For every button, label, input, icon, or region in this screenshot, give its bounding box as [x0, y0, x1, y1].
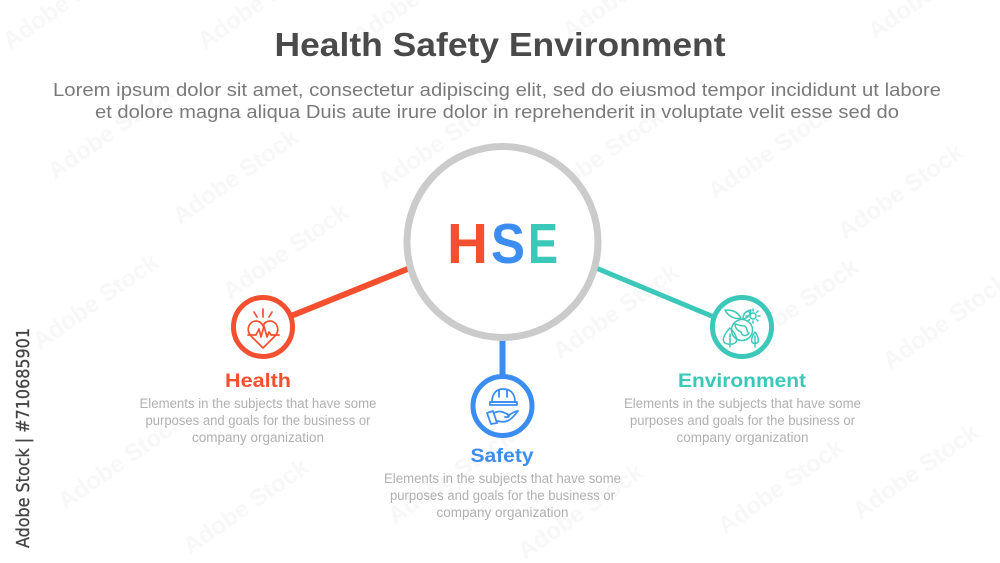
text: Adobe Stock — [43, 78, 179, 185]
connector: health — [291, 268, 410, 316]
intro paragraph: Lorem ipsum dolor sit amet, consectetur adipiscing elit, sed do eiusmod tempor incididunt ut labore — [53, 79, 941, 100]
environment description: company organization — [676, 430, 808, 445]
text: Adobe Stock — [178, 453, 314, 560]
central circle with HSE — [407, 146, 598, 338]
health label: Health — [225, 371, 291, 392]
environment description: purposes and goals for the business or — [630, 413, 855, 428]
health description: company organization — [192, 430, 324, 445]
safety description — [384, 471, 621, 520]
text: Adobe Stock — [53, 408, 189, 515]
central circle with HSE: E — [528, 212, 558, 276]
safety description: purposes and goals for the business or — [390, 488, 615, 503]
text: Adobe Stock — [383, 423, 519, 530]
environment description: Elements in the subjects that have some — [624, 396, 861, 411]
text: Adobe Stock — [533, 103, 669, 210]
title: Health Safety Environment — [274, 27, 726, 64]
safety label: Safety — [470, 446, 534, 467]
intro paragraph — [53, 79, 941, 122]
text: Adobe Stock — [218, 198, 354, 305]
environment label: Environment — [678, 371, 807, 392]
text: Adobe Stock — [713, 433, 849, 540]
text: Adobe Stock — [373, 88, 509, 195]
stock watermark id: Adobe Stock | #710685901 — [14, 328, 34, 548]
text: Adobe Stock — [703, 98, 839, 205]
connector: environment — [596, 268, 714, 317]
health description: Elements in the subjects that have some — [140, 396, 376, 411]
text: Adobe Stock — [728, 253, 864, 360]
text: Adobe Stock — [28, 248, 164, 355]
health description — [140, 396, 376, 445]
safety description: company organization — [436, 505, 568, 520]
connector: safety — [500, 338, 506, 378]
text: Adobe Stock — [168, 123, 304, 230]
environment description — [624, 396, 861, 445]
text: Adobe Stock — [548, 258, 684, 365]
icon: environment globe and plants — [712, 298, 772, 356]
text: Adobe Stock — [513, 458, 649, 563]
health description: purposes and goals for the business or — [146, 413, 371, 428]
central circle with HSE: H — [447, 212, 488, 276]
icon: health heart — [234, 298, 292, 356]
text: Adobe Stock — [833, 138, 969, 245]
text: Adobe Stock — [848, 418, 984, 525]
safety description: Elements in the subjects that have some — [384, 471, 621, 486]
central circle with HSE: S — [491, 212, 525, 276]
icon: safety helmet and hand — [473, 376, 532, 436]
intro paragraph: et dolore magna aliqua Duis aute irure dolor in reprehenderit in voluptate velit esse sed do — [95, 101, 899, 122]
